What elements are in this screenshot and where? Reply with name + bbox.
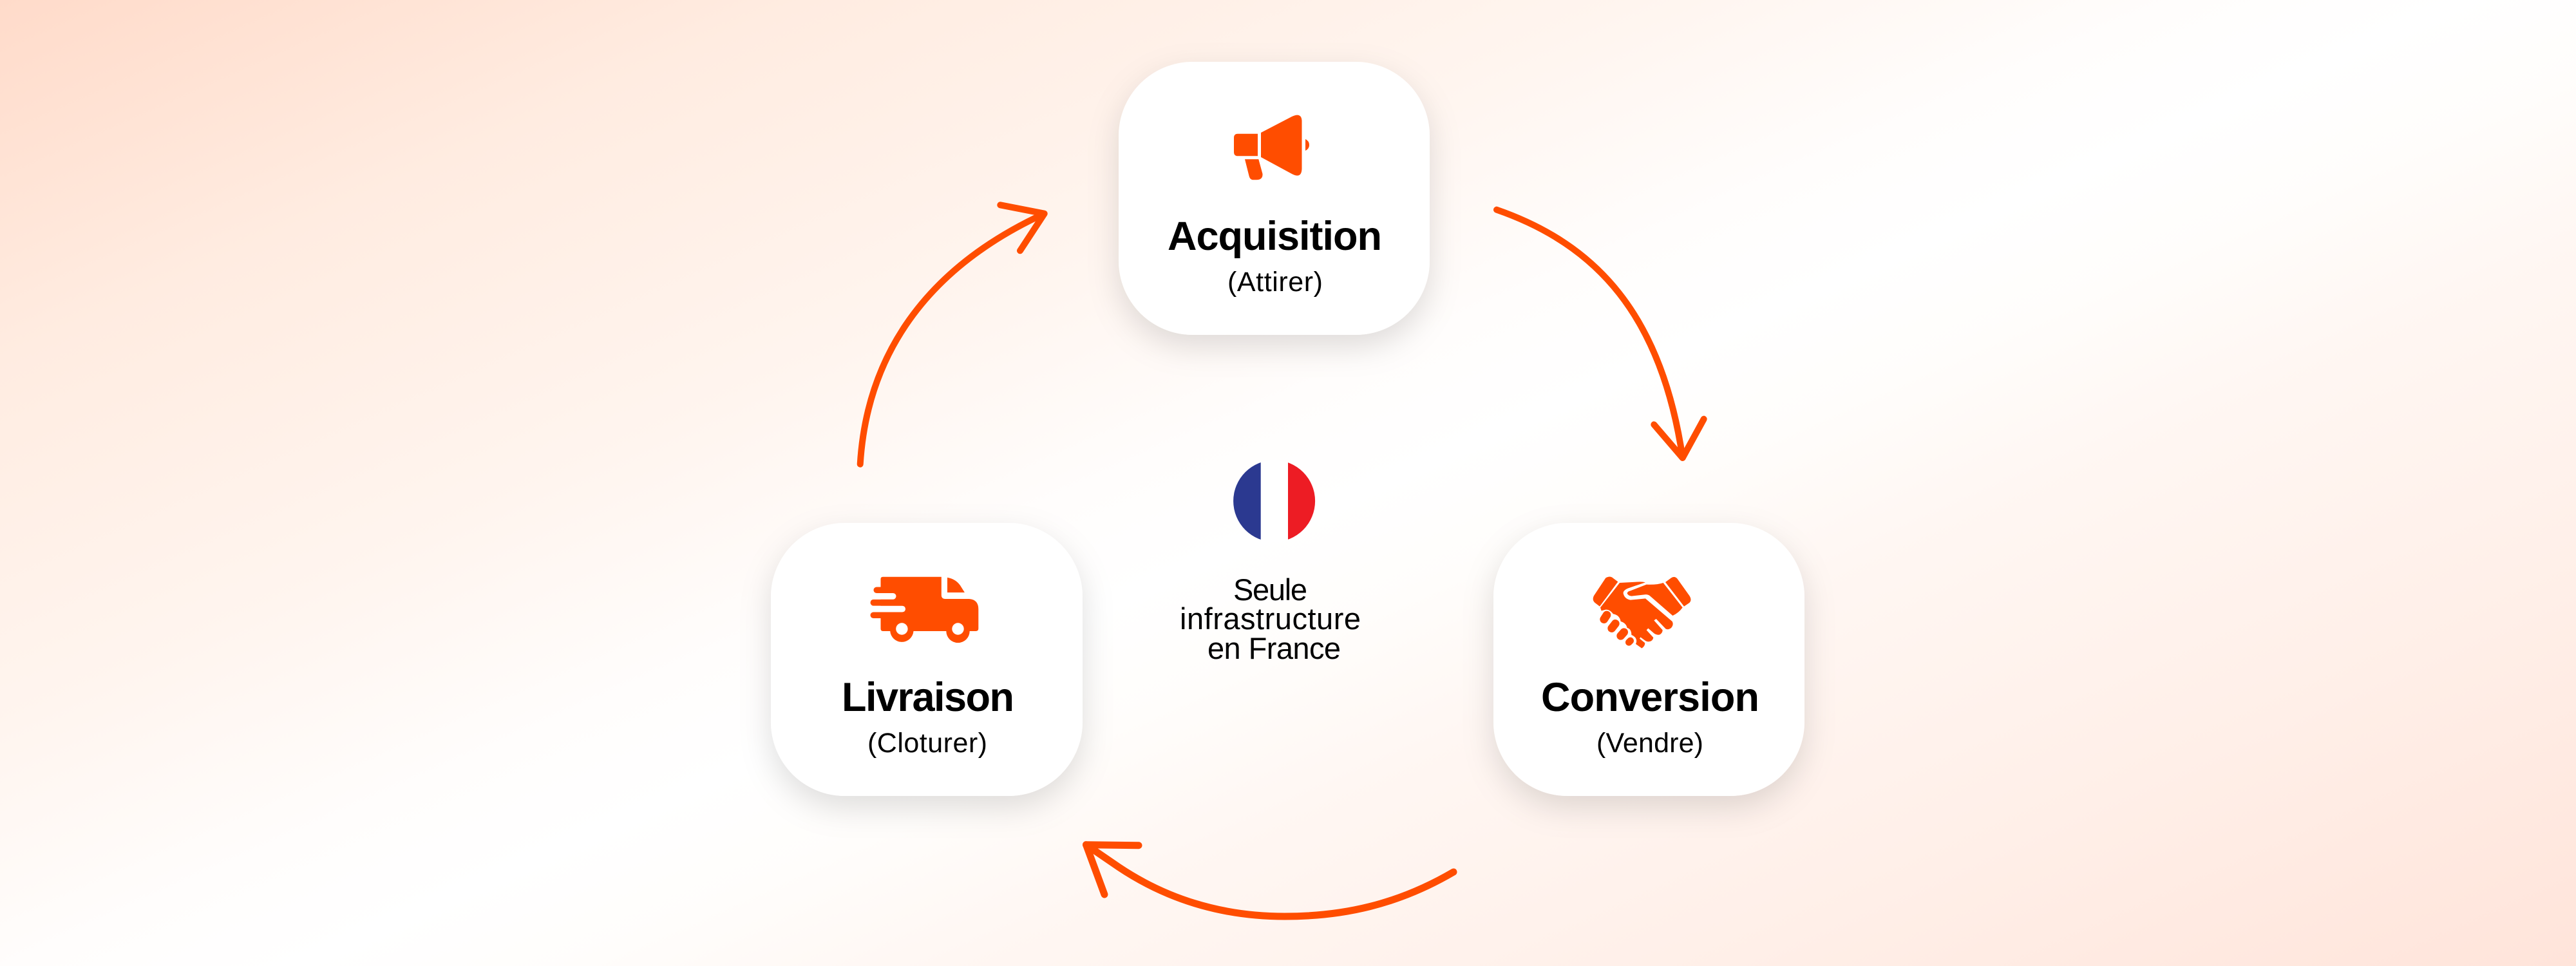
panel: Conversion card bbox=[1493, 523, 1804, 796]
arrow: Conversion to Livraison bbox=[1086, 845, 1454, 916]
panel: Livraison card bbox=[771, 523, 1083, 796]
text block: Seule infrastructure en France: Seule bbox=[1233, 573, 1307, 607]
icon: handshake bbox=[1593, 576, 1690, 649]
text block: Seule infrastructure en France: en France bbox=[1208, 631, 1341, 665]
icon: delivery truck bbox=[863, 577, 978, 643]
title: Acquisition: Acquisition bbox=[1168, 214, 1382, 259]
arrow: Acquisition to Conversion bbox=[1497, 210, 1704, 458]
icon: megaphone bbox=[1234, 115, 1309, 180]
subtitle: Cloturer: (Cloturer) bbox=[867, 728, 987, 759]
subtitle: Vendre: (Vendre) bbox=[1596, 728, 1703, 759]
title: Conversion: Conversion bbox=[1541, 675, 1759, 720]
title: Livraison: Livraison bbox=[842, 675, 1014, 720]
panel: Acquisition card bbox=[1119, 62, 1430, 335]
subtitle: Attirer: (Attirer) bbox=[1227, 267, 1323, 298]
text block: Seule infrastructure en France bbox=[1180, 573, 1361, 665]
text block: Seule infrastructure en France: infrastructure bbox=[1180, 601, 1361, 636]
icon: French flag bbox=[1233, 460, 1316, 542]
arrow: Livraison to Acquisition bbox=[860, 205, 1045, 464]
